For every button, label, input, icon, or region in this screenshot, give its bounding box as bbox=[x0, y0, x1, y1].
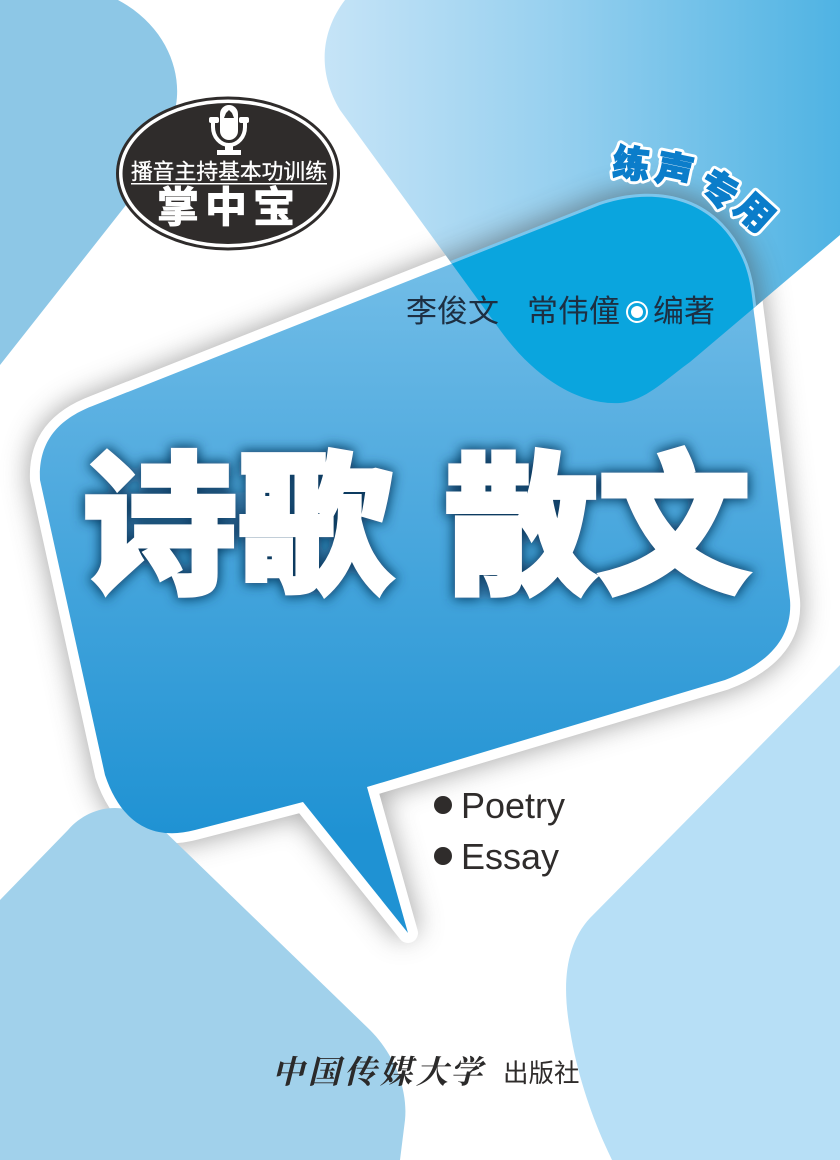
bullet and Poetry: Poetry bbox=[461, 785, 565, 826]
label: 练声专用 bbox=[611, 141, 782, 240]
background shape: bottom left bbox=[0, 808, 405, 1160]
label: 练声专用: 声 bbox=[652, 147, 697, 195]
title shadow: 散 bbox=[444, 442, 598, 614]
title shadow: 诗 bbox=[83, 442, 237, 614]
speech bubble bbox=[40, 197, 790, 933]
title: 文 bbox=[597, 442, 751, 614]
label: 练声专用: 练 bbox=[611, 141, 652, 187]
label: 练声专用: 用 bbox=[727, 185, 782, 240]
title shadow bbox=[83, 442, 751, 614]
authors: 常伟僮 bbox=[527, 294, 620, 329]
bullet and Essay: Essay bbox=[461, 836, 559, 877]
label fill reinforcement: 练 bbox=[611, 141, 652, 187]
publisher calligraphy: 媒 bbox=[380, 1047, 417, 1093]
authors: 编著 bbox=[653, 294, 715, 329]
logo ellipse bbox=[116, 96, 340, 250]
publisher calligraphy: 国 bbox=[308, 1047, 345, 1093]
logo rule bbox=[131, 183, 327, 184]
label fill reinforcement: 专 bbox=[692, 163, 745, 217]
publisher calligraphy: 传 bbox=[344, 1047, 380, 1093]
list: Poetry and Essay bbox=[434, 785, 565, 877]
publisher calligraphy: 中 bbox=[272, 1047, 308, 1093]
publisher calligraphy: 学 bbox=[450, 1047, 486, 1093]
logo badge bbox=[116, 96, 340, 250]
label fill reinforcement: 声 bbox=[652, 147, 697, 195]
title: 歌 bbox=[238, 442, 393, 614]
title shadow: 文 bbox=[597, 442, 751, 614]
label fill reinforcement: 用 bbox=[727, 185, 782, 240]
title bbox=[83, 442, 751, 614]
publisher suffix: 出版社 bbox=[503, 1060, 580, 1088]
background shape: bottom right bbox=[566, 665, 840, 1160]
icon: author separator bbox=[626, 301, 648, 323]
logo name: 掌中宝 bbox=[157, 184, 301, 231]
title: 散 bbox=[444, 442, 598, 614]
publisher calligraphy bbox=[272, 1047, 486, 1093]
label: 练声专用: 专 bbox=[692, 163, 745, 217]
publisher calligraphy: 大 bbox=[416, 1047, 452, 1093]
label fill reinforcement bbox=[611, 141, 782, 240]
bubble white outline bbox=[40, 197, 790, 933]
background shape: top right bbox=[325, 0, 840, 403]
icon: microphone bbox=[209, 105, 249, 155]
title: 诗 bbox=[83, 442, 237, 614]
authors: 李俊文 bbox=[406, 294, 499, 329]
overlap of top right shape and bubble bbox=[452, 196, 754, 404]
title shadow: 歌 bbox=[238, 442, 393, 614]
background shape: top left bbox=[0, 0, 177, 365]
bubble outline over top right shape bbox=[450, 194, 756, 308]
shadow over top right shape bbox=[437, 172, 776, 308]
bubble shadow bbox=[40, 197, 790, 933]
authors bbox=[406, 294, 715, 329]
logo subtitle: 播音主持基本功训练 bbox=[131, 160, 327, 184]
